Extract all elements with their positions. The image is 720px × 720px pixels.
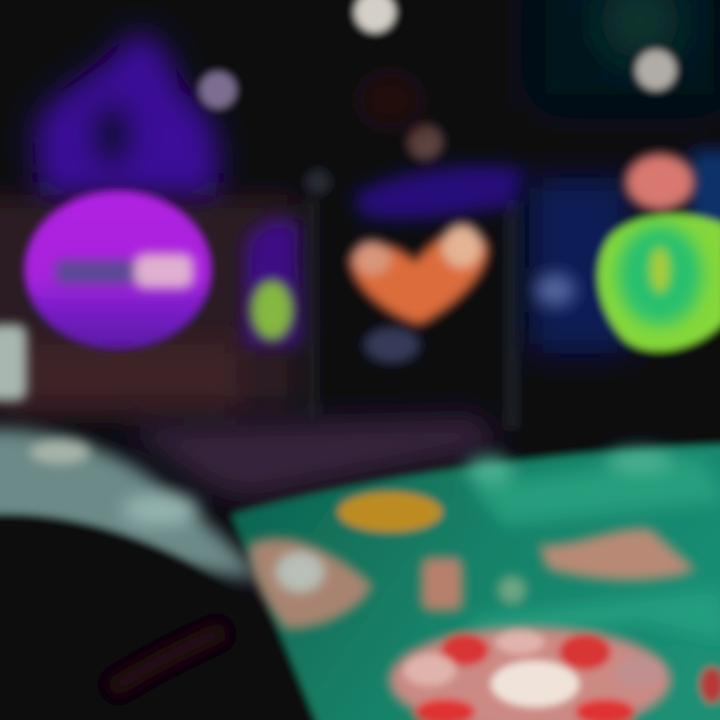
player hand [250, 539, 372, 628]
green casino table [232, 445, 720, 720]
orb label band [55, 254, 193, 288]
player head silhouette [0, 513, 300, 720]
cards left [422, 558, 462, 610]
cards right [540, 529, 695, 579]
purple smear upper left [35, 34, 219, 195]
small purple panel with green light [245, 219, 300, 345]
magenta orb sign [26, 192, 210, 348]
table markings [460, 450, 720, 640]
orange heart sign [350, 224, 487, 363]
purple banner [355, 166, 525, 219]
red rim on silhouette [110, 630, 225, 690]
ceiling lights [200, 0, 676, 195]
orange betting spot [338, 492, 442, 532]
wall and floor [0, 0, 720, 500]
player hair and shoulder [0, 325, 260, 580]
blue panel [530, 178, 630, 353]
green crown emblem [598, 150, 720, 350]
table details [338, 450, 720, 640]
poker chips [390, 628, 720, 720]
